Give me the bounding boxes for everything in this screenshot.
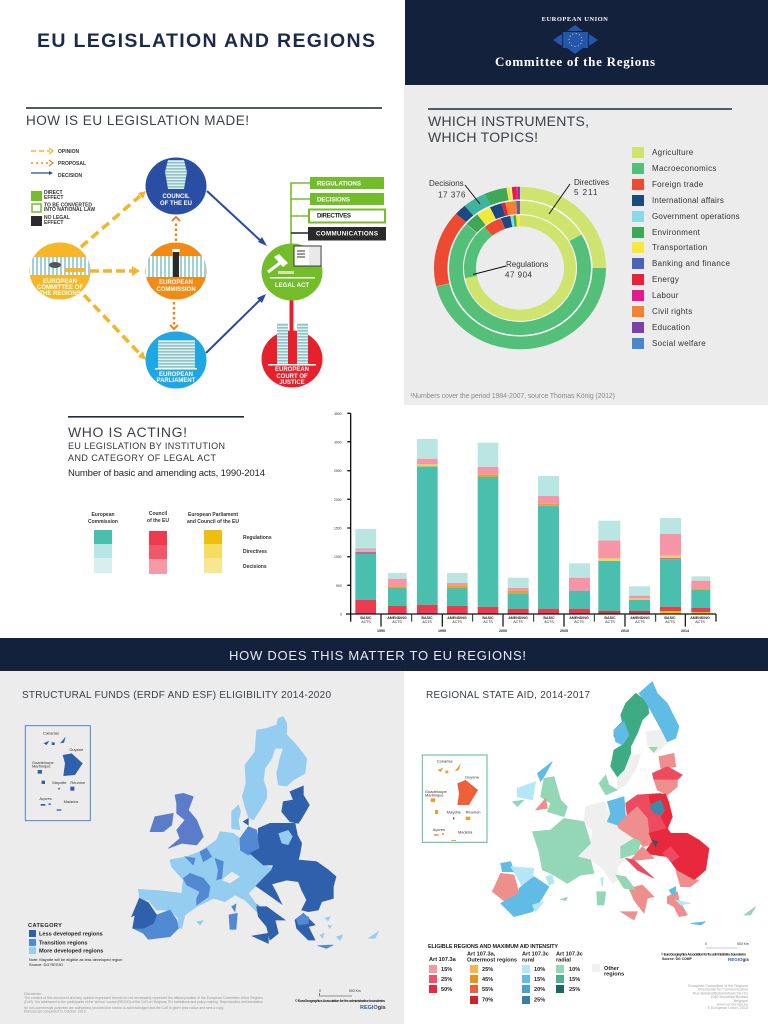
legend: topics: Education [652, 323, 690, 332]
legend: aid intensity: 15% [569, 977, 580, 983]
legend: aid intensity: Outermost regions [467, 958, 517, 964]
connector: court of justice [290, 299, 294, 335]
x axis labels: ACTS [392, 620, 402, 624]
scale and sources: REGIOgis [728, 957, 750, 962]
inset: outermost regions: Guadeloupe [32, 760, 54, 765]
legend: arrows: PROPOSAL [58, 161, 86, 167]
arrow: council decision [207, 191, 267, 246]
x axis labels: AMENDING [387, 616, 407, 620]
x axis labels: ACTS [513, 620, 523, 624]
legend: topics [632, 147, 740, 349]
inset: outermost regions: Martinique [32, 764, 51, 769]
arrow: parliament decision [206, 294, 266, 353]
y axis labels: 1500 [334, 526, 342, 530]
node: Court of Justice: COURT OF [276, 374, 308, 380]
node: European Commission [146, 242, 206, 300]
legend: topics: Transportation [652, 243, 708, 252]
footnote: ¹Numbers cover the period 1984-2007, source Thomas König (2012) [410, 393, 615, 400]
arrow: proposal to parliament [170, 302, 178, 329]
inset: outermost regions: Canarias [437, 758, 453, 763]
y axis labels: 3000 [334, 440, 342, 444]
legend: legal effect: INTO NATIONAL LAW [44, 207, 95, 213]
legend: institutions: Regulations [243, 535, 272, 541]
scale and credits: 500 Km [349, 989, 361, 993]
publisher address: www.cor.europa.eu [717, 1002, 748, 1006]
box: communications: COMMUNICATIONS [316, 230, 378, 238]
legend: aid intensity: 15% [534, 977, 545, 983]
legend: legal effect: EFFECT [44, 220, 63, 226]
legend: category: Note: Mayotte will be eligible as less developed region [29, 957, 122, 962]
legend: aid intensity: 10% [534, 967, 545, 973]
legend: legal effect: NO LEGAL [44, 215, 70, 221]
legend: aid intensity: Art 107.3c [556, 952, 583, 958]
inset: outermost regions: Açores [39, 796, 52, 801]
icon: EU flag logo [553, 25, 598, 54]
x axis labels: BASIC [664, 616, 676, 620]
legend: aid intensity: 50% [441, 987, 452, 993]
inset: outermost regions [25, 726, 90, 821]
x axis labels: 2014 [681, 629, 689, 633]
node: Legal act [262, 244, 322, 300]
scale and sources: Source: DG COMP [662, 957, 693, 961]
donut chart [408, 162, 632, 374]
heading: WHICH INSTRUMENTS, [428, 113, 589, 129]
disclaimer [24, 992, 263, 1014]
scale and sources: 500 Km [737, 942, 749, 946]
scale and sources: 0 [705, 942, 707, 946]
legend: aid intensity: Other [604, 966, 620, 972]
box: communications [308, 227, 386, 240]
box: directives: DIRECTIVES [317, 212, 351, 220]
legend: arrows [31, 148, 86, 179]
heading: REGIONAL STATE AID, 2014-2017 [426, 690, 590, 701]
legend: institutions [88, 511, 272, 574]
inset: outermost regions: Madeira [458, 830, 473, 835]
legend: institutions: Decisions [243, 564, 267, 570]
Greek transition region [296, 913, 309, 925]
y axis labels: 2500 [334, 469, 342, 473]
x axis labels: AMENDING [630, 616, 650, 620]
UK and Ireland [150, 793, 203, 848]
label: directives: 5 211 [574, 188, 598, 197]
legend: institutions: European Parliament [188, 512, 238, 518]
legend: aid intensity: Art 107.3a [429, 957, 457, 963]
publisher address: © European Union, 2015 [707, 1006, 748, 1010]
x axis labels: 2000 [499, 629, 507, 633]
heading: WHO IS ACTING! [68, 424, 187, 440]
x axis labels: AMENDING [447, 616, 467, 620]
x axis labels: 1990 [377, 629, 385, 633]
subheading: EU LEGISLATION BY INSTITUTION [68, 441, 225, 451]
legend: institutions: Directives [243, 549, 267, 555]
more developed regions [138, 717, 378, 941]
y axis labels [334, 412, 342, 616]
inset: outermost regions [422, 755, 487, 842]
arrow: opinion to commission [90, 266, 140, 276]
inset: outermost regions: Guyane [69, 747, 84, 752]
panel: who is acting [68, 412, 716, 633]
inset: outermost regions: Canarias [43, 731, 59, 736]
panel: how is EU legislation made [26, 107, 386, 388]
legend: aid intensity: regions [604, 972, 624, 978]
scale and credits: REGIOgis [360, 1005, 386, 1011]
legend: aid intensity: Art 107.3c [522, 952, 549, 958]
panel: structural funds [0, 671, 404, 1024]
x axis labels: ACTS [483, 620, 493, 624]
x axis labels: ACTS [544, 620, 554, 624]
legend: legal effect [31, 190, 95, 226]
panel: regional state aid [422, 682, 756, 1010]
less developed regions [132, 786, 336, 943]
Switzerland [222, 872, 240, 883]
x axis labels: ACTS [422, 620, 432, 624]
inset: outermost regions: Madeira [64, 799, 79, 804]
inset: outermost regions: Réunion [70, 780, 85, 785]
icon: council building [165, 160, 187, 189]
icon: committee building [30, 257, 90, 275]
legend: aid intensity: 70% [482, 998, 493, 1004]
x axis labels: AMENDING [508, 616, 528, 620]
node: Council of the EU: COUNCIL [162, 194, 190, 200]
x axis labels: BASIC [421, 616, 433, 620]
stacked bars [346, 413, 716, 627]
legend: institutions: Commission [88, 519, 118, 525]
x axis labels: AMENDING [690, 616, 710, 620]
y axis labels: 3500 [334, 412, 342, 416]
legend: institutions: and Council of the EU [187, 519, 239, 525]
legend: aid intensity: 55% [482, 987, 493, 993]
Warsaw region [278, 830, 293, 845]
map: state aid [492, 682, 756, 925]
scale and credits [295, 989, 386, 1011]
map: eligibility [132, 717, 378, 948]
publisher address: Directorate for Communication [698, 988, 748, 992]
legend: aid intensity: 20% [534, 987, 545, 993]
legend: aid intensity: 25% [441, 977, 452, 983]
header: Committee of the Regions: EUROPEAN UNION [542, 16, 608, 23]
legend: legal effect: EFFECT [44, 195, 63, 201]
legend: aid intensity: 15% [441, 967, 452, 973]
x axis labels: AMENDING [569, 616, 589, 620]
node: Committee of the Regions: THE REGIONS [39, 291, 81, 297]
legend: category: Source: DG REGIO [29, 962, 63, 967]
label: decisions [429, 179, 480, 204]
node: Legal act: LEGAL ACT [275, 283, 309, 289]
node: European Parliament: EUROPEAN [159, 372, 193, 378]
legend: aid intensity: 10% [569, 967, 580, 973]
disclaimer: for non-commercial purposes are authorised, provided the source is acknowledged and the CoR is given prior notice and sent a copy. [24, 1006, 224, 1010]
banner [0, 638, 768, 671]
legend: arrows: DECISION [58, 173, 83, 179]
x axis labels: ACTS [361, 620, 371, 624]
subheading [68, 441, 265, 479]
legend: category: Transition regions [39, 940, 88, 946]
legend: legal effect: TO BE CONVERTED [44, 202, 92, 208]
node: Committee of the Regions [30, 242, 90, 300]
legend: category [28, 923, 122, 967]
node: Court of Justice: EUROPEAN [275, 367, 309, 373]
inset: outermost regions: Guadeloupe [425, 789, 447, 794]
icon: book [294, 246, 321, 266]
label: regulations [473, 260, 548, 280]
heading: HOW IS EU LEGISLATION MADE! [26, 113, 249, 128]
x axis labels: ACTS [605, 620, 615, 624]
x axis labels: ACTS [695, 620, 705, 624]
box: regulations [310, 177, 384, 189]
icon: commission building [146, 249, 206, 277]
publisher address: European Committee of the Regions [688, 984, 748, 988]
legend: institutions: of the EU [147, 518, 169, 524]
legend: aid intensity: 45% [482, 977, 493, 983]
x axis labels [360, 616, 710, 633]
publisher address [688, 984, 748, 1010]
legend: topics: Agriculture [652, 148, 694, 157]
heading: WHICH TOPICS! [428, 129, 538, 145]
publisher address: Rue Belliard/Belliardstraat 99-101 [693, 992, 748, 996]
y axis labels: 0 [340, 612, 342, 616]
publisher address: 1040 Bruxelles/Brussel [710, 995, 748, 999]
legend: aid intensity: ELIGIBLE REGIONS AND MAXIMUM AID INTENSITY [428, 944, 558, 950]
legend: aid intensity: rural [522, 958, 535, 964]
box: decisions: DECISIONS [317, 196, 350, 204]
legend: aid intensity: 25% [569, 987, 580, 993]
node: Court of Justice: JUSTICE [279, 380, 305, 386]
legend: topics: Environment [652, 228, 701, 237]
node: European Parliament: PARLIAMENT [157, 378, 196, 384]
y axis labels: 500 [336, 584, 342, 588]
transition regions [133, 827, 333, 948]
legend: legal effect: DIRECT [44, 190, 63, 196]
label: regulations: 47 904 [505, 270, 533, 280]
legend: topics: Civil rights [652, 307, 692, 316]
legend: topics: Energy [652, 275, 679, 284]
legend: arrows: OPINION [58, 149, 80, 155]
bar chart [334, 412, 716, 633]
icon: gavel [268, 254, 315, 278]
x axis labels: 1995 [438, 629, 446, 633]
panel: instruments background [404, 85, 768, 405]
node: Committee of the Regions: COMMITTEE OF [37, 285, 83, 291]
legend: topics: Labour [652, 291, 679, 300]
legend: aid intensity: 25% [534, 998, 545, 1004]
icon: parliament building [158, 340, 195, 368]
legend: topics: International affairs [652, 196, 724, 205]
arrow: proposal to council [172, 217, 180, 241]
legend: topics: Foreign trade [652, 180, 704, 189]
disclaimer: The content of this document and any opinion expressed therein do not necessarily represent the official position of the European Committee of the Regions [24, 996, 263, 1000]
subheading: AND CATEGORY OF LEGAL ACT [68, 453, 216, 463]
legend: aid intensity [428, 944, 624, 1004]
inset: outermost regions: Réunion [466, 810, 481, 815]
legend: topics: Social welfare [652, 339, 706, 348]
inset: outermost regions: Açores [433, 827, 445, 832]
legend: aid intensity: Art 107.3a, [467, 952, 496, 958]
icon: court towers [268, 323, 316, 366]
label: decisions: 17 376 [438, 190, 466, 200]
heading: STRUCTURAL FUNDS (ERDF AND ESF) ELIGIBILITY 2014-2020 [22, 690, 331, 701]
x axis labels: BASIC [482, 616, 494, 620]
legend: aid intensity: radial [556, 958, 571, 964]
y axis labels: 2000 [334, 498, 342, 502]
legend: category: Less developed regions [39, 932, 103, 938]
x axis labels: ACTS [635, 620, 645, 624]
disclaimer: Manuscript completed in October 2015 [24, 1010, 86, 1014]
x axis labels: ACTS [665, 620, 675, 624]
header: Committee of the Regions [405, 0, 768, 85]
banner: HOW DOES THIS MATTER TO EU REGIONS! [229, 648, 526, 663]
node: European Commission: COMMISSION [156, 287, 196, 293]
scale and sources: © EuroGeographics Association for the administrative boundaries [661, 952, 746, 956]
disclaimer: (CoR). It is addressed to the participants of the 'ad hoc' course (REGIO) of the CoR on 'Regions, EU institutions and policy making'. Reproduction and translation [24, 1000, 263, 1004]
subheading: Number of basic and amending acts, 1990-2014 [68, 468, 265, 479]
connector: legal act to instruments [291, 183, 310, 245]
inset: outermost regions: Mayotte [447, 810, 462, 815]
panel: which instruments [408, 108, 740, 400]
label: regulations: Regulations [506, 260, 548, 269]
label: directives: Directives [574, 178, 609, 187]
scale and credits: © EuroGeographics Association for the administrative boundaries [295, 999, 385, 1003]
node: Council of the EU [146, 158, 206, 214]
scale and credits: 0 [319, 989, 321, 993]
inset: outermost regions: Mayotte [52, 780, 67, 785]
node: Committee of the Regions: EUROPEAN [43, 279, 77, 285]
node: European Parliament [146, 332, 206, 388]
box: decisions [310, 193, 384, 205]
x axis labels: BASIC [604, 616, 616, 620]
label: decisions: Decisions [429, 179, 464, 188]
publisher address: Belgique [734, 999, 748, 1003]
inset: outermost regions: Guyane [465, 775, 480, 780]
arrow: opinion to parliament [84, 295, 146, 360]
title: EU LEGISLATION AND REGIONS [37, 30, 375, 52]
node: Council of the EU: OF THE EU [160, 201, 192, 207]
node: European Commission: EUROPEAN [159, 280, 193, 286]
legend: category: More developed regions [39, 948, 103, 954]
header: Committee of the Regions: Committee of the Regions [495, 54, 655, 69]
box: regulations: REGULATIONS [317, 180, 361, 188]
legend: topics: Banking and finance [652, 259, 730, 268]
legend: category: CATEGORY [28, 923, 62, 929]
x axis labels: ACTS [574, 620, 584, 624]
heading [428, 113, 589, 145]
legend: aid intensity: 25% [482, 967, 493, 973]
x axis labels: BASIC [543, 616, 555, 620]
x axis labels: BASIC [360, 616, 372, 620]
x axis labels: ACTS [452, 620, 462, 624]
scale and sources [661, 942, 750, 962]
legend: topics: Macroeconomics [652, 164, 717, 173]
legend: institutions: European [91, 512, 115, 518]
inset: outermost regions: Martinique [425, 793, 444, 798]
box: directives [309, 210, 385, 222]
y axis labels: 1000 [334, 555, 342, 559]
arrow: opinion to council [81, 191, 146, 247]
node: Court of Justice [262, 323, 322, 388]
legend: topics: Government operations [652, 212, 740, 221]
legend: institutions: Council [149, 511, 168, 517]
disclaimer: Disclaimer: [24, 992, 42, 996]
label: directives [549, 178, 609, 214]
x axis labels: 2005 [560, 629, 568, 633]
x axis labels: 2010 [621, 629, 629, 633]
